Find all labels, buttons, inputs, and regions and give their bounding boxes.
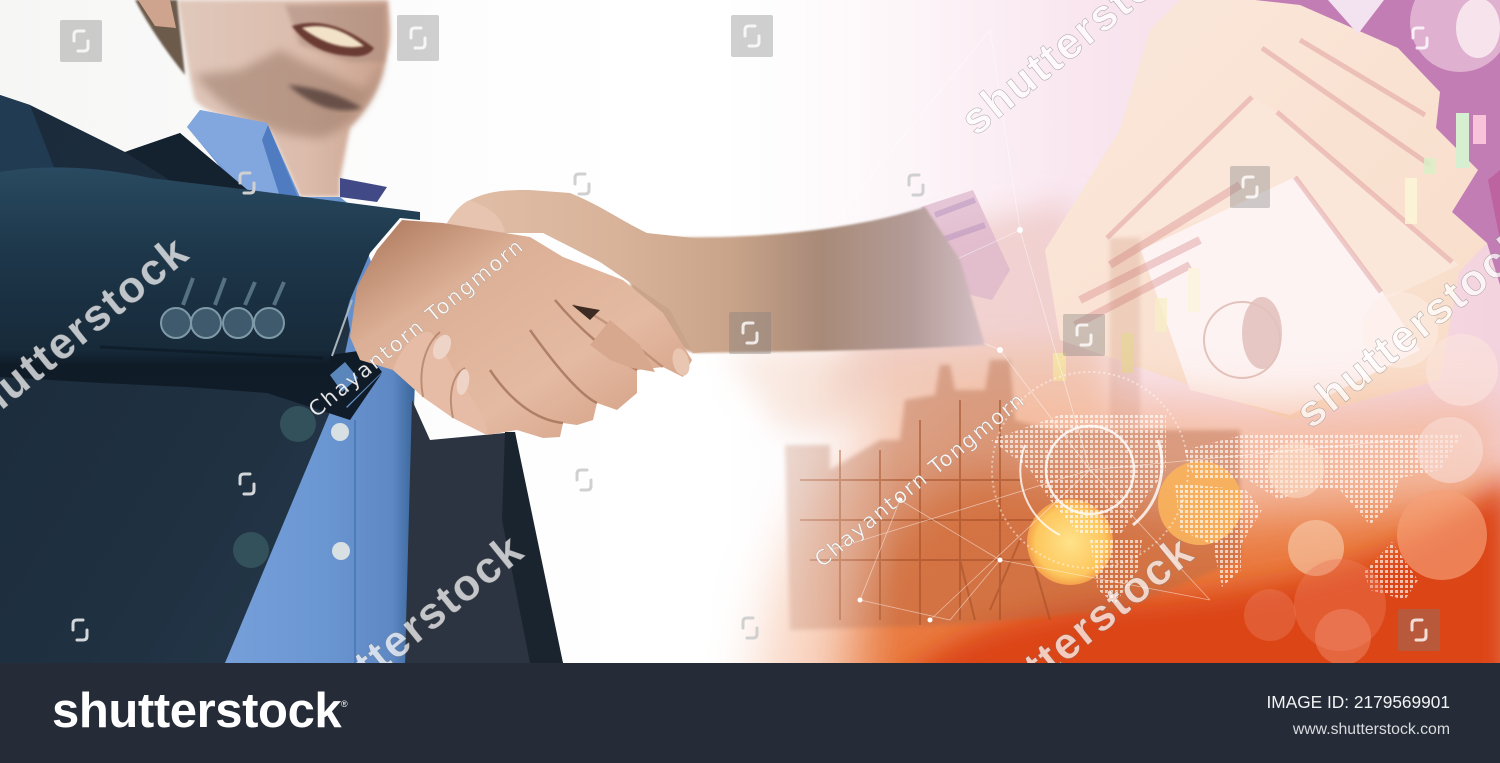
orange heat lower right bbox=[740, 385, 1500, 720]
globe rings bbox=[992, 372, 1188, 568]
world map dots bbox=[991, 415, 1463, 604]
bokeh lights bbox=[1244, 292, 1498, 665]
watermark: logo tiles bbox=[60, 15, 1440, 651]
refinery pipes bbox=[800, 400, 1050, 625]
shutterstock logo: shutterstock bbox=[52, 684, 341, 738]
watermark: outlined logo marks bbox=[240, 173, 923, 638]
footer bar bbox=[0, 663, 1500, 763]
site url: www.shutterstock.com bbox=[1293, 721, 1450, 738]
man face and neck bbox=[135, 0, 390, 197]
golden glow bbox=[1027, 461, 1242, 585]
network nodes bbox=[795, 227, 1023, 622]
candlestick bars bbox=[1053, 113, 1486, 381]
shirt bbox=[187, 110, 415, 663]
money fan bbox=[921, 0, 1487, 420]
watermark: photographer name: Chayantorn Tongmorn bbox=[304, 235, 527, 422]
watermark: photographer name bbox=[304, 235, 1029, 572]
jacket body bbox=[0, 95, 563, 663]
sunset clouds behind the far arm bbox=[720, 200, 1120, 440]
watermark: photographer name: Chayantorn Tongmorn bbox=[810, 388, 1029, 572]
white fade over the middle bbox=[600, 0, 900, 663]
top right purple corner bbox=[1255, 0, 1500, 285]
far arm bbox=[620, 207, 985, 353]
jacket sleeve with buttons bbox=[0, 167, 420, 420]
network lines bbox=[800, 30, 1400, 620]
refinery silhouette bbox=[785, 238, 1240, 630]
image id: IMAGE ID: 2179569901 bbox=[1266, 692, 1450, 712]
clasped hands bbox=[350, 190, 730, 438]
registered mark: ® bbox=[341, 699, 348, 709]
watermark: logo glyph marks bbox=[73, 26, 1427, 640]
